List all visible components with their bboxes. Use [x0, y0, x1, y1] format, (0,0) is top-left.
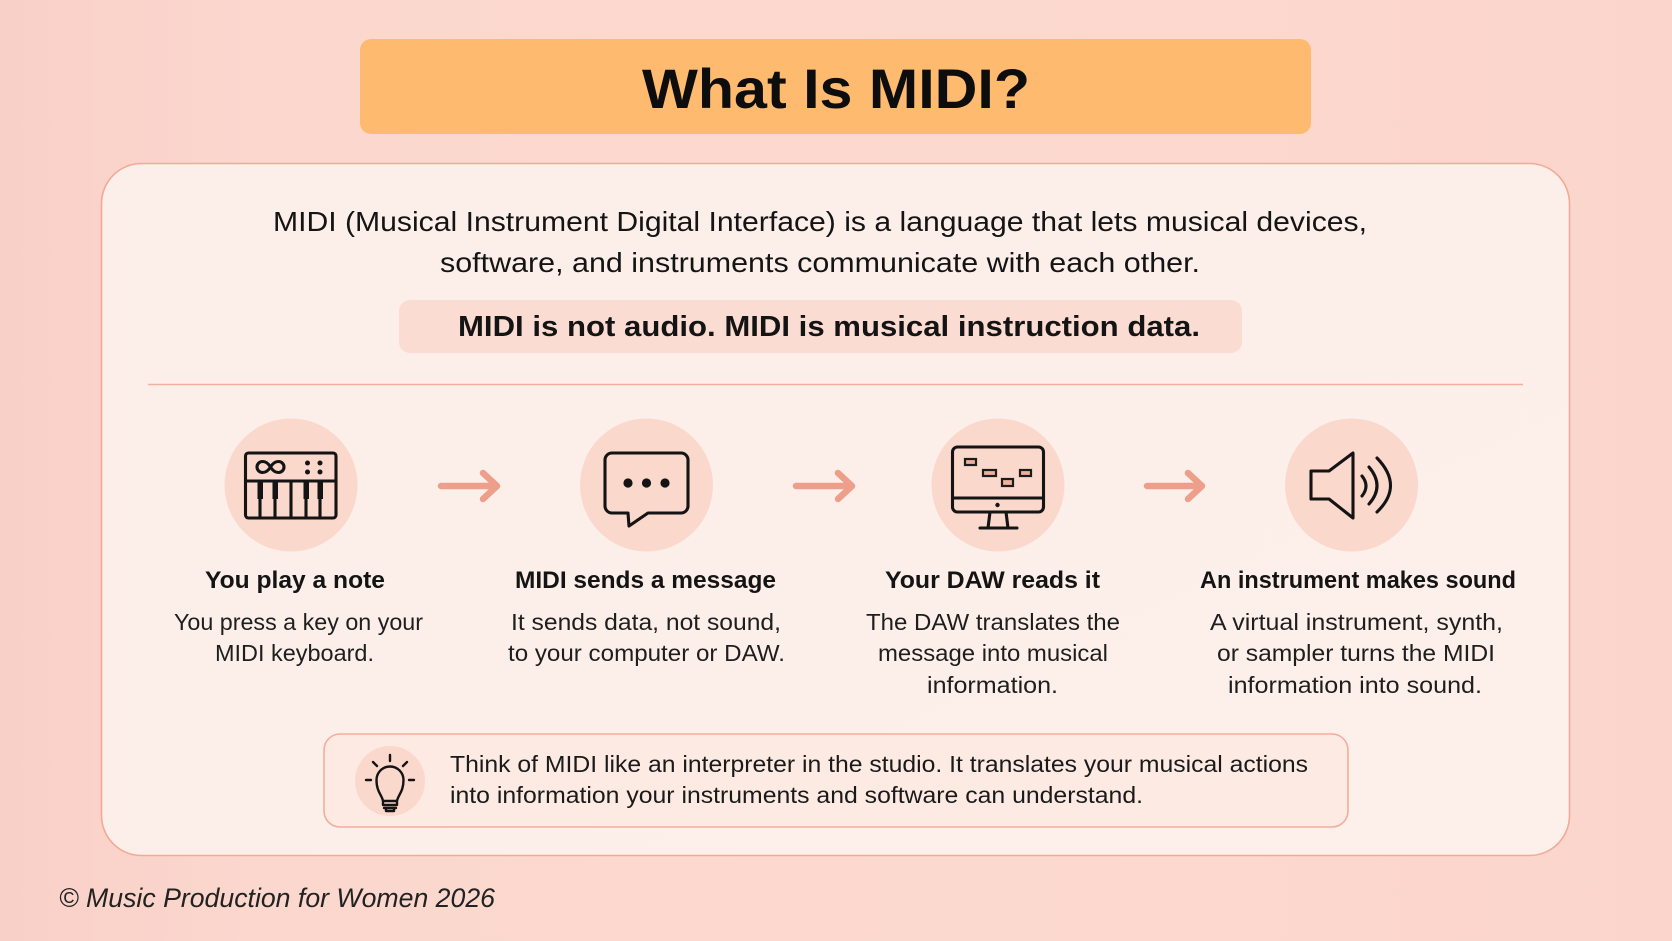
step 4: an instrument makes sound: or sampler turns the MIDI	[1217, 640, 1495, 666]
panel: main content	[102, 164, 1570, 856]
step 1: you play a note	[174, 418, 423, 666]
step 4: an instrument makes sound: information into sound.	[1228, 672, 1482, 698]
tip callout	[324, 734, 1348, 827]
step 4: an instrument makes sound: An instrument makes sound	[1200, 567, 1516, 594]
intro text: MIDI (Musical Instrument Digital Interface) is a language that lets musical devices,	[273, 206, 1367, 237]
step 2: MIDI sends a message	[508, 418, 785, 666]
step 1: you play a note: MIDI keyboard.	[215, 640, 374, 666]
arrow 1	[441, 473, 497, 499]
step 2: MIDI sends a message: MIDI sends a message	[515, 567, 776, 594]
step 4: an instrument makes sound	[1200, 418, 1516, 698]
step 3: your DAW reads it	[866, 418, 1120, 698]
arrow 3	[1147, 473, 1202, 499]
highlight callout	[399, 300, 1242, 353]
highlight callout: MIDI is not audio. MIDI is musical instruction data.	[458, 311, 1200, 343]
step 2: MIDI sends a message: It sends data, not sound,	[511, 609, 781, 635]
intro text: software, and instruments communicate with each other.	[440, 247, 1200, 278]
tip callout: Think of MIDI like an interpreter in the studio. It translates your musical actions	[450, 751, 1308, 777]
icon: light bulb	[355, 746, 425, 816]
step 1: you play a note: You play a note	[205, 567, 385, 594]
footer copyright: © Music Production for Women 2026	[59, 883, 496, 913]
arrow 2	[796, 473, 852, 499]
step 2: MIDI sends a message: to your computer or DAW.	[508, 640, 785, 666]
step 3: your DAW reads it: information.	[927, 672, 1058, 698]
step 3: your DAW reads it: message into musical	[878, 640, 1108, 666]
icon: MIDI keyboard	[224, 418, 358, 552]
tip callout: into information your instruments and software can understand.	[450, 782, 1143, 808]
intro text	[273, 206, 1367, 278]
step 3: your DAW reads it: The DAW translates the	[866, 609, 1120, 635]
icon: speaker	[1285, 418, 1418, 552]
title banner: What Is MIDI?	[642, 57, 1030, 120]
icon: speech bubble	[580, 418, 713, 552]
step 3: your DAW reads it: Your DAW reads it	[885, 567, 1100, 594]
step 4: an instrument makes sound: A virtual instrument, synth,	[1210, 609, 1503, 635]
step 1: you play a note: You press a key on your	[174, 609, 423, 635]
icon: computer monitor with MIDI notes	[932, 418, 1064, 552]
title banner	[360, 39, 1311, 134]
